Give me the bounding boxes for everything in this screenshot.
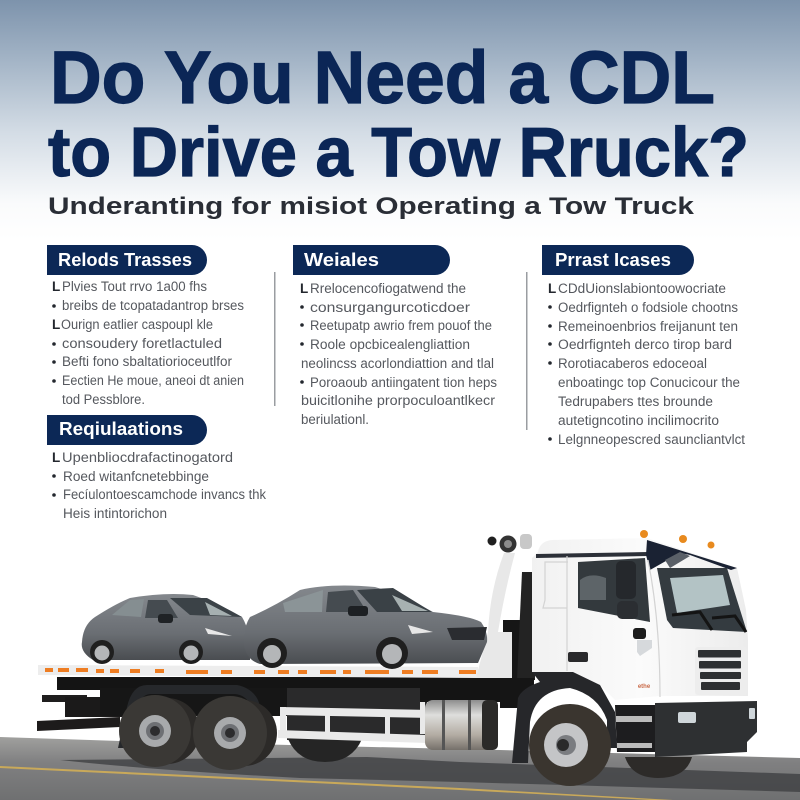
heading: Reqiulaations: [47, 415, 207, 445]
roof markers: [640, 530, 714, 548]
cab body: [532, 538, 748, 700]
panel: Prrast Icases: [542, 245, 745, 447]
windshield: [657, 568, 747, 632]
wipers: [672, 612, 746, 632]
title: Do You Need a CDL: [50, 36, 715, 119]
front wheel: [529, 704, 611, 786]
spare middle wheel: [288, 739, 362, 762]
heading: Reqiulaations: Reqiulaations: [59, 419, 183, 439]
heading: Weiales: Weiales: [304, 250, 379, 270]
car: front sedan: [244, 586, 487, 669]
chassis frame: [57, 677, 500, 740]
text block: Prrast Icases list: autetigncotino incilimocrito: [558, 413, 719, 428]
car: rear sedan: [82, 594, 250, 664]
rear wheels: [119, 695, 277, 770]
cab: [532, 530, 748, 700]
grille: [695, 647, 747, 695]
text block: Prrast Icases list: Oedrfignteh derco tirop bard: [558, 337, 732, 352]
text block: Prrast Icases list: Oedrfignteh o fodsiole chootns: [558, 300, 738, 315]
far front wheel: [625, 757, 692, 778]
heading: Weiales: [293, 245, 450, 275]
heading: Relods Trasses: Relods Trasses: [58, 250, 192, 270]
heading: Prrast Icases: [542, 245, 694, 275]
text block: Relods Trasses list: tod Pessblore.: [62, 392, 145, 407]
text block: Reqiulaations list: Roed witanfcnetebbinge: [63, 469, 209, 484]
column divider left: [274, 272, 276, 406]
text block: Weiales list: [300, 281, 497, 427]
door outline: [543, 556, 660, 697]
text block: Reqiulaations list: [52, 450, 266, 521]
front bumper: [655, 701, 757, 757]
text block: Reqiulaations list: Upenbliocdrafactinogatord: [62, 450, 233, 465]
text block: Weiales list: Reetupatp awrio frem pouof the: [310, 318, 492, 333]
side window: [578, 558, 650, 622]
background sky gradient: [0, 0, 800, 240]
text block: Weiales list: Poroaoub antiingatent tion heps: [310, 375, 497, 390]
roof visor: [646, 540, 737, 570]
text block: Prrast Icases list: Tedrupabers ttes brounde: [558, 394, 713, 409]
text block: Relods Trasses list: Eectien He moue, aneoi dt anien: [62, 373, 244, 388]
road: [0, 737, 800, 800]
text block: Prrast Icases list: CDdUionslabiontoowocriate: [558, 281, 726, 296]
text block: Relods Trasses list: Plvies Tout rrvo 1a00 fhs: [62, 279, 207, 294]
text block: Reqiulaations list: Heis intintorichon: [63, 506, 167, 521]
tow truck: [37, 530, 757, 786]
text block: Reqiulaations list: L: [52, 450, 60, 465]
title: to Drive a Tow Rruck?: [48, 113, 749, 191]
title: [48, 36, 749, 191]
panel: Reqiulaations: [47, 415, 266, 521]
column divider right: [526, 272, 528, 430]
text block: Weiales list: Rrelocencofiogatwend the: [310, 281, 466, 296]
step panel: [615, 705, 657, 752]
subtitle: Underanting for misiot Operating a Tow Truck: [48, 193, 694, 220]
text block: Relods Trasses list: L: [52, 317, 60, 332]
text block: Relods Trasses list: breibs de tcopatadantrop brses: [62, 298, 244, 313]
text block: Weiales list: neolincss acorlondiattion and tlal: [301, 356, 494, 371]
text block: Relods Trasses list: consoudery foretlactuled: [62, 336, 222, 351]
text block: Relods Trasses list: Ourign eatlier caspoupl kle: [61, 317, 213, 332]
headache rack tower: [476, 553, 535, 708]
door handle: [568, 652, 588, 662]
text block: Relods Trasses list: [52, 279, 244, 407]
text block: Reqiulaations list: Fecíulontoescamchode invancs thk: [63, 487, 266, 502]
mirror: [616, 561, 652, 656]
text block: Prrast Icases list: enboatingc top Conucicour the: [558, 375, 740, 390]
text block: Prrast Icases list: Rorotiacaberos edoceoal: [558, 356, 707, 371]
fuel tank: [425, 700, 498, 750]
rear wheel arch: [118, 685, 270, 748]
text block: Relods Trasses list: L: [52, 279, 60, 294]
front wheel arch: [512, 672, 617, 763]
cab badge: ethe: [638, 684, 651, 690]
text block: Weiales list: Roole opcbicealengliattion: [310, 337, 470, 352]
text block: Prrast Icases list: [548, 281, 745, 447]
flatbed deck: [38, 665, 478, 678]
panel: Weiales: [293, 245, 497, 427]
text block: Prrast Icases list: Remeinoenbrios freijanunt ten: [558, 319, 738, 334]
text block: Weiales list: beriulationl.: [301, 412, 369, 427]
text block: Prrast Icases list: Lelgnneopescred sauncliantvlct: [558, 432, 745, 447]
text block: Prrast Icases list: L: [548, 281, 556, 296]
text block: Weiales list: buicitlonihe prorpoculoantlkecr: [301, 393, 496, 408]
heading: Prrast Icases: Prrast Icases: [555, 250, 671, 270]
work lights: [488, 534, 532, 552]
heading: Relods Trasses: [47, 245, 207, 275]
panel: Relods Trasses: [47, 245, 244, 407]
text block: Relods Trasses list: Befti fono sbaltatiorioceutlfor: [62, 354, 232, 369]
side guard rails: [278, 702, 482, 743]
text block: Weiales list: consurgangurcoticdoer: [310, 300, 471, 315]
text block: Weiales list: L: [300, 281, 308, 296]
rear bumper and underride bars: [37, 695, 125, 731]
